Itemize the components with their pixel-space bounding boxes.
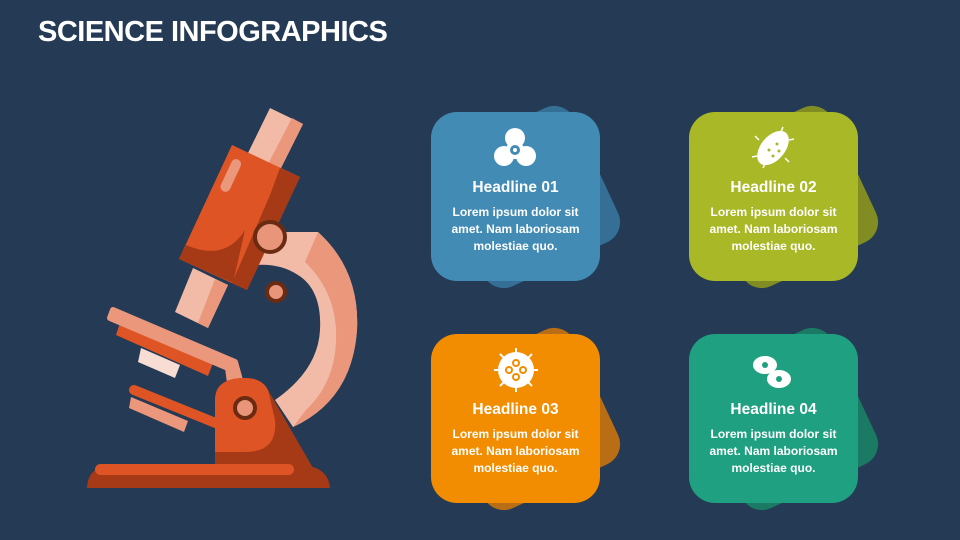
card 1: Headline 01 <box>472 179 559 196</box>
card 4: amet. Nam laboriosam <box>709 444 838 458</box>
slide <box>138 348 180 378</box>
lower arm <box>129 397 188 432</box>
base pillar <box>215 378 313 468</box>
microscope illustration <box>87 108 358 488</box>
card 3: molestiae quo. <box>473 461 558 475</box>
card 3: Lorem ipsum dolor sit <box>452 427 578 441</box>
back shapes <box>431 99 627 295</box>
card 2: amet. Nam laboriosam <box>709 222 838 236</box>
card 2 <box>689 112 858 281</box>
card 1: Lorem ipsum dolor sit <box>452 205 578 219</box>
card 3 <box>431 334 600 503</box>
card 4: molestiae quo. <box>731 461 816 475</box>
card 1 <box>431 112 600 281</box>
icon: virus <box>494 348 538 392</box>
knobs <box>255 222 285 252</box>
card 2: Lorem ipsum dolor sit <box>710 205 836 219</box>
card 1: amet. Nam laboriosam <box>451 222 580 236</box>
card 4 <box>689 334 858 503</box>
card 3: Headline 03 <box>472 401 559 418</box>
tube body <box>179 145 300 290</box>
card 2: molestiae quo. <box>731 239 816 253</box>
lower objective <box>175 268 228 328</box>
icon: cell cluster <box>494 128 536 166</box>
icon: cells <box>753 356 791 388</box>
card 1: molestiae quo. <box>473 239 558 253</box>
card 2: Headline 02 <box>730 179 817 196</box>
icon: bacterium <box>752 126 794 168</box>
card 3: amet. Nam laboriosam <box>451 444 580 458</box>
eyepiece <box>248 108 303 170</box>
title: SCIENCE INFOGRAPHICS <box>38 16 387 48</box>
card 4: Headline 04 <box>730 401 817 418</box>
arm <box>253 232 357 427</box>
base <box>87 465 330 488</box>
stage <box>116 323 213 376</box>
card 4: Lorem ipsum dolor sit <box>710 427 836 441</box>
